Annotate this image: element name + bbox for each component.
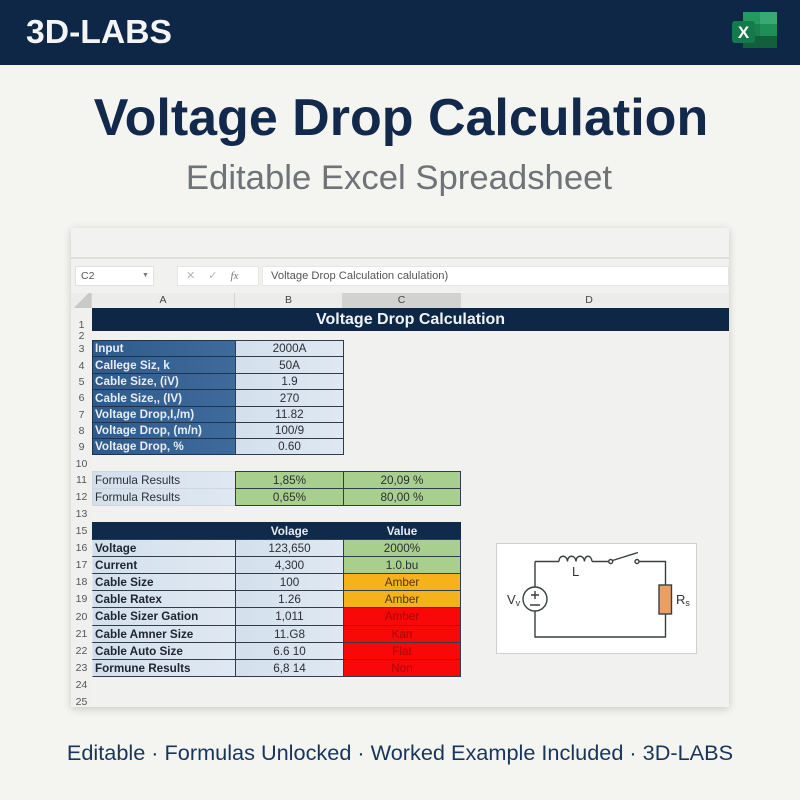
input table: Callege Siz, k bbox=[95, 358, 170, 372]
footer tagline: Editable · Formulas Unlocked · Worked Example Included · 3D-LABS bbox=[67, 740, 733, 765]
header bar bbox=[0, 0, 800, 65]
text: 25 bbox=[76, 696, 87, 708]
row numbers bbox=[71, 308, 92, 707]
results table: 123,650 bbox=[268, 542, 311, 554]
results table: Amber bbox=[385, 592, 419, 606]
formula results table: 0,65% bbox=[273, 490, 306, 504]
input table: Voltage Drop, (m/n) bbox=[95, 424, 202, 437]
column B: B bbox=[285, 294, 292, 306]
sheet title row: Voltage Drop Calculation bbox=[316, 311, 505, 328]
results table: Current bbox=[95, 558, 137, 572]
icon: excel logo: X bbox=[738, 23, 750, 42]
input table: Voltage Drop, % bbox=[95, 440, 184, 453]
select-all corner bbox=[71, 293, 92, 308]
results table: Amber bbox=[385, 576, 419, 588]
results table: Flat bbox=[392, 644, 412, 658]
input table: 270 bbox=[280, 392, 299, 404]
subtitle: Editable Excel Spreadsheet bbox=[186, 159, 612, 197]
input table: 100/9 bbox=[275, 424, 304, 437]
column D: D bbox=[585, 294, 593, 306]
column C bbox=[343, 293, 461, 308]
input table: Cable Size, (iV) bbox=[95, 375, 179, 388]
text: 11 bbox=[76, 474, 87, 486]
text: 21 bbox=[76, 628, 87, 640]
results table: Cable Amner Size bbox=[95, 628, 193, 640]
circuit diagram: L bbox=[572, 564, 579, 579]
input table: 0.60 bbox=[278, 440, 301, 453]
results table bbox=[92, 522, 461, 677]
input table: 50A bbox=[279, 358, 300, 372]
results table: Value bbox=[387, 524, 417, 538]
formula buttons: ✕ ✓ fx bbox=[186, 270, 238, 282]
results table: 6,8 14 bbox=[273, 662, 306, 674]
results table: Formune Results bbox=[95, 662, 190, 674]
input table: 1.9 bbox=[281, 375, 298, 388]
column A bbox=[92, 293, 235, 308]
text: 13 bbox=[76, 508, 87, 520]
formula results table bbox=[92, 471, 461, 506]
results table: Amber bbox=[385, 610, 419, 623]
formula results table: 80,00 % bbox=[381, 490, 423, 504]
text: 2 bbox=[79, 330, 84, 342]
results table: Non bbox=[391, 662, 413, 674]
results table: 1.26 bbox=[278, 592, 301, 606]
text: 4 bbox=[79, 360, 84, 372]
text: 7 bbox=[79, 409, 84, 421]
text: 22 bbox=[76, 645, 87, 657]
results table: Cable Sizer Gation bbox=[95, 610, 198, 623]
results table: 1.0.bu bbox=[386, 558, 418, 572]
text: 23 bbox=[76, 662, 87, 674]
name box: C2 bbox=[81, 270, 94, 282]
text: 24 bbox=[76, 679, 87, 691]
results table: 1,011 bbox=[275, 610, 304, 623]
results table: Volage bbox=[271, 524, 308, 538]
column A: A bbox=[159, 294, 166, 306]
text: 9 bbox=[79, 441, 84, 453]
results table: Kan bbox=[392, 628, 412, 640]
circuit diagram: R bbox=[676, 592, 685, 607]
results table: 6.6 10 bbox=[273, 644, 306, 658]
column headers bbox=[71, 293, 729, 308]
text: 6 bbox=[79, 392, 84, 404]
text: 17 bbox=[76, 559, 87, 571]
circuit diagram bbox=[496, 543, 697, 654]
text: 12 bbox=[76, 491, 87, 503]
column C: C bbox=[398, 294, 405, 306]
results table: 2000% bbox=[384, 542, 420, 554]
formula bar bbox=[262, 266, 729, 286]
results table: 11.G8 bbox=[274, 628, 305, 640]
text: 20 bbox=[76, 611, 87, 623]
text: 10 bbox=[76, 458, 87, 470]
text: 15 bbox=[76, 525, 87, 537]
text: 16 bbox=[76, 542, 87, 554]
text: 18 bbox=[76, 576, 87, 588]
title: Voltage Drop Calculation bbox=[94, 89, 708, 147]
input table: 2000A bbox=[273, 342, 306, 355]
column B bbox=[235, 293, 343, 308]
results table: 100 bbox=[280, 576, 299, 588]
text: 19 bbox=[76, 593, 87, 605]
results table: Cable Auto Size bbox=[95, 644, 183, 658]
text: 3 bbox=[79, 343, 84, 355]
input table bbox=[92, 340, 344, 455]
column D bbox=[461, 293, 729, 308]
text: 8 bbox=[79, 425, 84, 437]
results table: Cable Ratex bbox=[95, 592, 162, 606]
formula results table: Formula Results bbox=[95, 474, 180, 486]
results table: Voltage bbox=[95, 542, 136, 554]
panel: spreadsheet bbox=[71, 228, 729, 707]
icon: excel logo bbox=[732, 12, 777, 48]
input table: Input bbox=[95, 342, 124, 355]
formula buttons bbox=[177, 266, 259, 286]
formula results table: 20,09 % bbox=[381, 474, 423, 486]
input table: Cable Size,, (IV) bbox=[95, 392, 182, 404]
circuit diagram: v bbox=[516, 598, 521, 608]
input table: Voltage Drop,I,/m) bbox=[95, 408, 194, 421]
name box bbox=[75, 266, 154, 286]
results table: Cable Size bbox=[95, 576, 153, 588]
formula results table: 1,85% bbox=[273, 474, 306, 486]
brand name: 3D-LABS bbox=[26, 13, 172, 51]
input table: 11.82 bbox=[275, 408, 304, 421]
panel: ribbon strip bbox=[71, 228, 729, 259]
formula results table: Formula Results bbox=[95, 490, 180, 504]
sheet title row bbox=[92, 308, 729, 331]
results table: 4,300 bbox=[275, 558, 304, 572]
text: 5 bbox=[79, 376, 84, 388]
circuit diagram: s bbox=[685, 598, 690, 608]
circuit diagram: V bbox=[507, 592, 516, 607]
name box: ▼ bbox=[142, 272, 149, 279]
text: 1 bbox=[79, 319, 84, 331]
formula bar: Voltage Drop Calculation calulation) bbox=[271, 270, 448, 282]
